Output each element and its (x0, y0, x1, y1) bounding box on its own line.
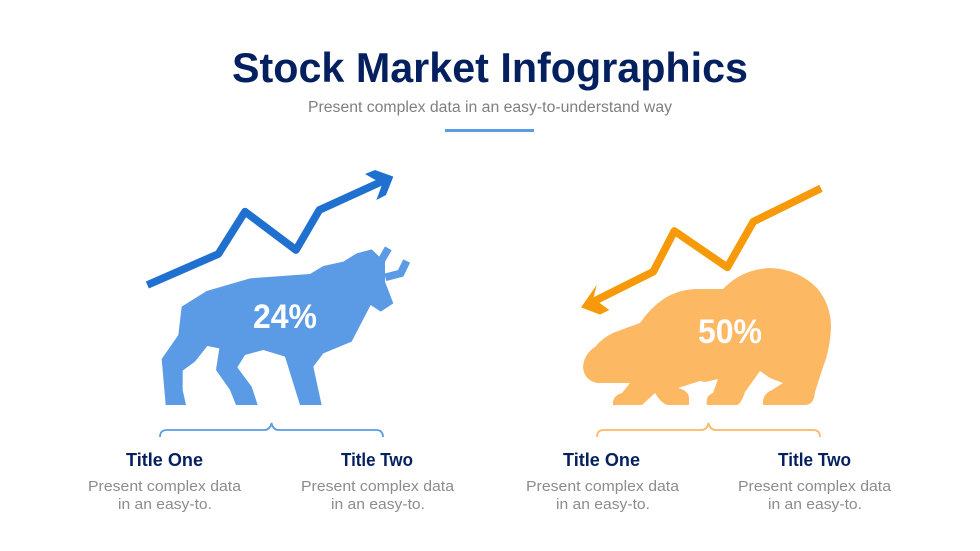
arrow: rising trend (147, 170, 393, 285)
text block: bull title one: Title One (126, 450, 203, 470)
panel: bear market (526, 188, 892, 513)
text block: bear title one (526, 450, 680, 513)
text block: bear title one: in an easy-to. (556, 496, 650, 513)
bracket: bear (597, 423, 820, 437)
icon: bear silhouette (583, 268, 831, 405)
text block: bear title one: Title One (563, 450, 640, 470)
title underline (445, 129, 534, 132)
subtitle: Present complex data in an easy-to-understand way (308, 99, 672, 116)
text block: bear title two (738, 450, 892, 513)
text block: bear title two: Title Two (778, 450, 851, 470)
text block: bull title two (301, 450, 455, 513)
panel: bull market (88, 170, 455, 513)
arrow: falling trend (581, 188, 821, 315)
text block: bear title one: Present complex data (526, 478, 680, 495)
text block: bull title two: Present complex data (301, 478, 455, 495)
bracket: bull (160, 423, 383, 437)
bull percentage: 24% (253, 298, 317, 336)
title: Stock Market Infographics (232, 44, 748, 91)
bear percentage: 50% (698, 313, 762, 351)
text block: bull title one (88, 450, 242, 513)
text block: bear title two: Present complex data (738, 478, 892, 495)
text block: bear title two: in an easy-to. (768, 496, 862, 513)
text block: bull title two: Title Two (341, 450, 413, 470)
text block: bull title one: in an easy-to. (118, 496, 212, 513)
text block: bull title two: in an easy-to. (331, 496, 425, 513)
text block: bull title one: Present complex data (88, 478, 242, 495)
icon: bull silhouette (162, 248, 407, 405)
